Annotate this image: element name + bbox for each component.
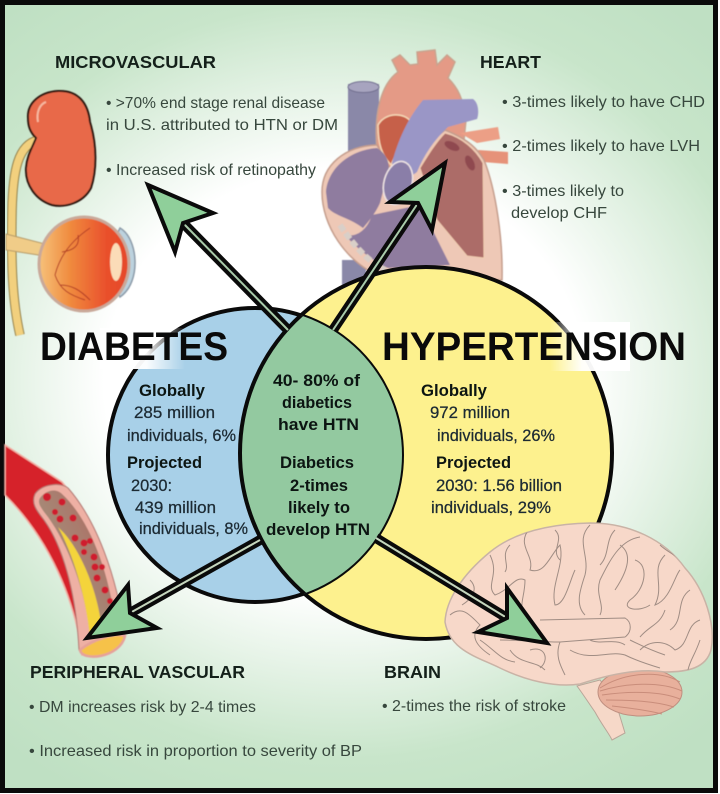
text block: overlap statistics: 40- 80% of xyxy=(273,372,361,390)
text block: peripheral vascular bullets: • DM increases risk by 2-4 times xyxy=(29,699,256,716)
text block: heart bullets: • 3-times likely to have CHD xyxy=(502,94,705,111)
text block: microvascular bullets xyxy=(106,95,338,179)
pulmonary artery xyxy=(392,99,478,176)
arrow: to peripheral vascular xyxy=(87,540,260,638)
text block: diabetes statistics: 439 million xyxy=(135,499,216,517)
text block: brain bullet: • 2-times the risk of stroke xyxy=(382,698,566,715)
text block: heart bullets: • 3-times likely to xyxy=(502,183,624,200)
text block: hypertension statistics: individuals, 26% xyxy=(437,427,555,445)
text block: hypertension statistics xyxy=(421,382,562,517)
text block: peripheral vascular bullets xyxy=(29,699,362,760)
arrow: to brain xyxy=(376,538,547,643)
gyri folds xyxy=(450,525,700,675)
text block: hypertension statistics: individuals, 29% xyxy=(431,499,551,517)
text block: heart bullets: develop CHF xyxy=(511,205,607,222)
text block: hypertension statistics: 972 million xyxy=(430,404,510,422)
text block: overlap statistics: Diabetics xyxy=(280,454,354,472)
icon: brain xyxy=(445,523,712,740)
text block: diabetes statistics xyxy=(127,382,248,538)
right atrium xyxy=(326,148,389,228)
text block: hypertension statistics: 2030: 1.56 billion xyxy=(436,477,562,495)
right ventricle xyxy=(345,205,450,268)
aortic arch xyxy=(376,50,466,175)
heading: heart: HEART xyxy=(480,52,541,72)
panel: diabetes circle xyxy=(108,308,402,602)
text block: hypertension statistics: Globally xyxy=(421,382,488,400)
icon: eye with optic nerve xyxy=(6,217,135,311)
heading: brain: BRAIN xyxy=(384,662,441,682)
text block: diabetes statistics: 285 million xyxy=(134,404,215,422)
arrow: to microvascular xyxy=(148,185,288,330)
icon: heart xyxy=(322,50,508,290)
cerebellum xyxy=(598,668,682,716)
text block: microvascular bullets: in U.S. attributed to HTN or DM xyxy=(106,117,338,134)
icon: blood vessel with plaque xyxy=(5,445,125,657)
text block: hypertension statistics: Projected xyxy=(436,454,511,472)
heading: microvascular: MICROVASCULAR xyxy=(55,52,216,72)
text block: peripheral vascular bullets: • Increased risk in proportion to severity of BP xyxy=(29,743,362,760)
text block: diabetes statistics: Globally xyxy=(139,382,206,400)
text block: diabetes statistics: Projected xyxy=(127,454,202,472)
text block: diabetes statistics: individuals, 8% xyxy=(139,520,248,538)
panel: overlap lens xyxy=(238,316,402,594)
icon: kidney with ureter xyxy=(12,91,95,335)
text block: diabetes statistics: individuals, 6% xyxy=(127,427,236,445)
title halo right xyxy=(550,322,630,371)
text block: heart bullets: • 2-times likely to have LVH xyxy=(502,138,700,155)
title halo left xyxy=(100,328,185,369)
text block: microvascular bullets: • Increased risk of retinopathy xyxy=(106,162,316,179)
left ventricle xyxy=(420,133,484,258)
outer wall xyxy=(322,130,502,280)
title: hypertension: HYPERTENSION xyxy=(382,325,686,369)
title: diabetes: DIABETES xyxy=(40,325,228,369)
text block: overlap statistics: 2-times xyxy=(290,477,348,495)
text block: overlap statistics: develop HTN xyxy=(266,521,370,539)
text block: overlap statistics: diabetics xyxy=(282,394,352,412)
pulmonary veins xyxy=(460,127,500,143)
text block: overlap statistics: likely to xyxy=(288,499,350,517)
arrow: to heart xyxy=(333,163,445,330)
heading: peripheral vascular: PERIPHERAL VASCULAR xyxy=(30,662,245,682)
text block: microvascular bullets: • >70% end stage renal disease xyxy=(106,95,325,112)
text block: diabetes statistics: 2030: xyxy=(131,477,172,495)
brain stem xyxy=(577,680,625,740)
panel: hypertension circle xyxy=(240,267,612,639)
cerebrum xyxy=(445,523,712,685)
text block: overlap statistics xyxy=(266,372,370,539)
text block: heart bullets xyxy=(502,94,705,222)
text block: overlap statistics: have HTN xyxy=(278,416,359,434)
superior vena cava xyxy=(348,84,379,174)
